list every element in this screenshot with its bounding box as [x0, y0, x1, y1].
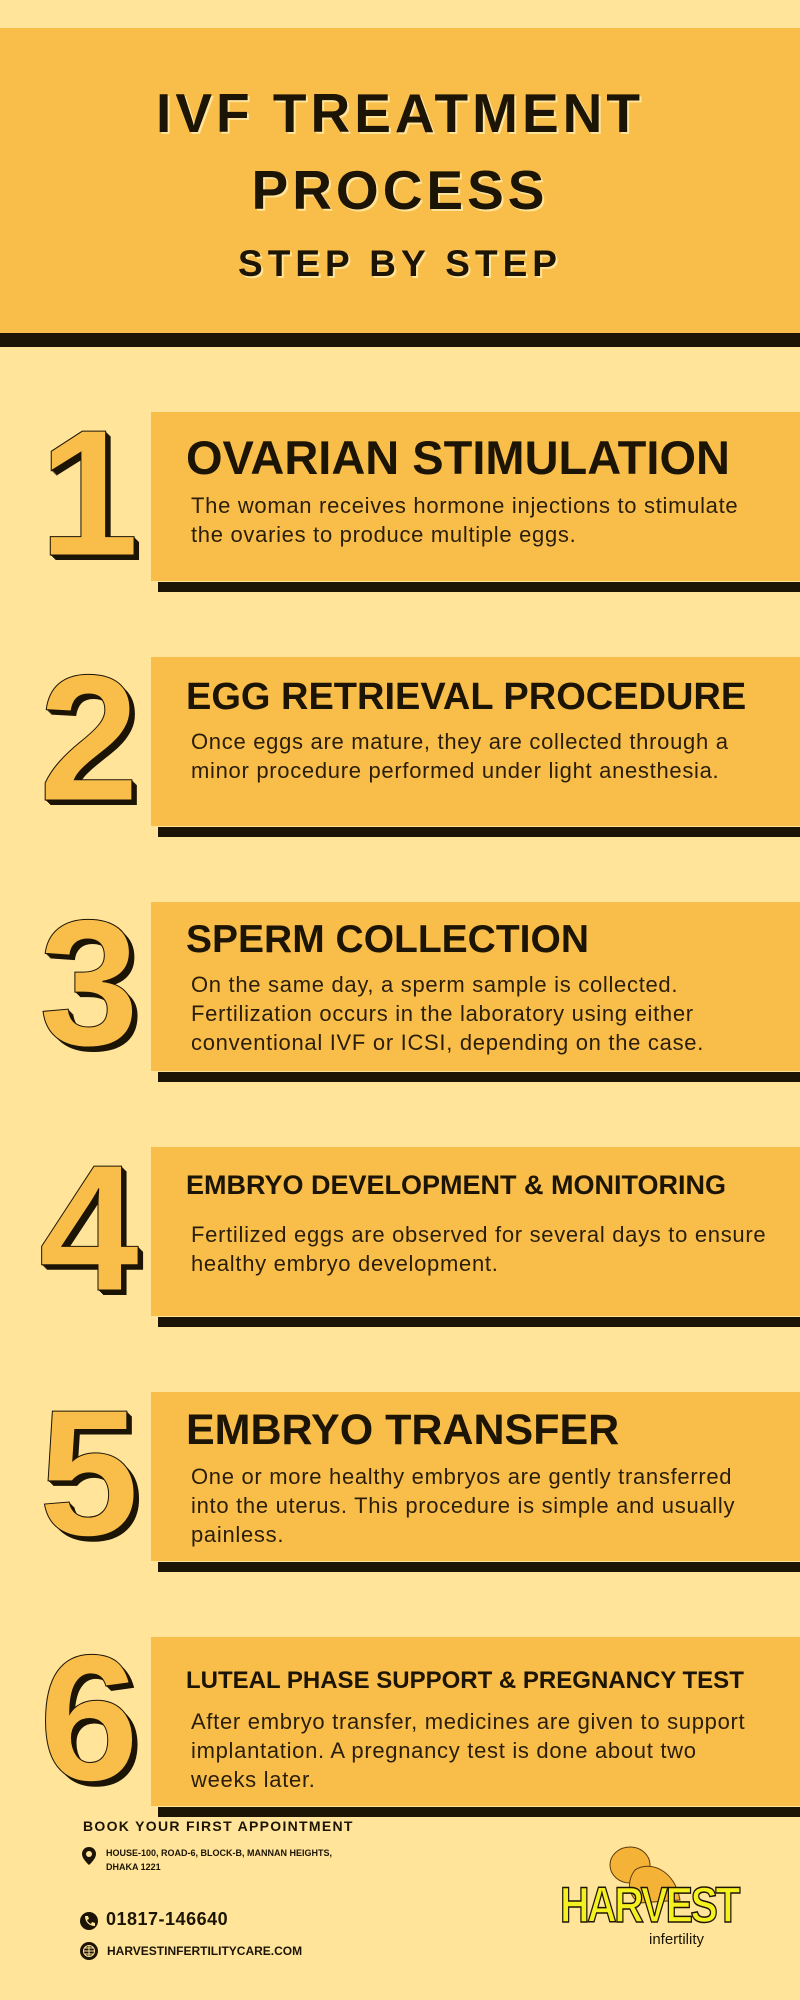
number 3: 3 [39, 883, 139, 1084]
heading 1: OVARIAN STIMULATION [186, 431, 730, 484]
text 1: the ovaries to produce multiple eggs. [191, 522, 576, 547]
card 5 [151, 1392, 800, 1561]
website: HARVESTINFERTILITYCARE.COM [107, 1944, 302, 1958]
title line 1: IVF TREATMENT [156, 82, 644, 144]
icon: location [82, 1847, 96, 1865]
heading 2: EGG RETRIEVAL PROCEDURE [186, 676, 746, 718]
logo text HARVEST: HARVEST [560, 1877, 738, 1933]
text 4 [191, 1222, 766, 1276]
number 2: 2 [39, 638, 139, 839]
phone number: 01817-146640 [106, 1909, 228, 1929]
address [106, 1848, 332, 1872]
card 1 [151, 412, 800, 581]
card 3 [151, 902, 800, 1071]
card 4 [151, 1147, 800, 1316]
text 4: healthy embryo development. [191, 1251, 499, 1276]
step 4 [39, 1128, 800, 1329]
text 3: Fertilization occurs in the laboratory using either [191, 1001, 694, 1026]
number 1: 1 [39, 393, 139, 594]
address: DHAKA 1221 [106, 1862, 161, 1872]
step 1 [39, 393, 800, 594]
header panel [0, 28, 800, 333]
text 6: implantation. A pregnancy test is done about two [191, 1738, 697, 1763]
number 5: 5 [39, 1373, 139, 1574]
address: HOUSE-100, ROAD-6, BLOCK-B, MANNAN HEIGHTS, [106, 1848, 332, 1858]
title [156, 82, 644, 284]
step 3 [39, 883, 800, 1084]
text 5 [191, 1464, 735, 1547]
text 6: After embryo transfer, medicines are given to support [191, 1709, 745, 1734]
text 3: On the same day, a sperm sample is collected. [191, 972, 678, 997]
number 6: 6 [39, 1618, 139, 1819]
card 6 [151, 1637, 800, 1806]
heading 4: EMBRYO DEVELOPMENT & MONITORING [186, 1170, 726, 1200]
logo [560, 1846, 741, 1948]
heading 5: EMBRYO TRANSFER [186, 1406, 619, 1454]
text 2: minor procedure performed under light anesthesia. [191, 758, 719, 783]
step 5 [39, 1373, 800, 1574]
number 4: 4 [39, 1128, 139, 1329]
text 5: One or more healthy embryos are gently transferred [191, 1464, 732, 1489]
text 2 [191, 729, 729, 783]
step 6 [39, 1618, 800, 1819]
title line 2: PROCESS [252, 159, 548, 221]
text 2: Once eggs are mature, they are collected through a [191, 729, 729, 754]
text 3 [191, 972, 704, 1055]
icon: baby [610, 1846, 681, 1904]
text 5: into the uterus. This procedure is simple and usually [191, 1493, 735, 1518]
logo text infertility: infertility [649, 1931, 704, 1948]
text 6 [191, 1709, 745, 1792]
heading 6: LUTEAL PHASE SUPPORT & PREGNANCY TEST [186, 1667, 744, 1694]
footer contact [80, 1818, 354, 1960]
book heading: BOOK YOUR FIRST APPOINTMENT [83, 1818, 354, 1834]
text 5: painless. [191, 1522, 284, 1547]
icon: globe [80, 1942, 98, 1960]
subtitle: STEP BY STEP [238, 243, 562, 284]
heading 3: SPERM COLLECTION [186, 918, 589, 961]
card 2 [151, 657, 800, 826]
text 1: The woman receives hormone injections to stimulate [191, 493, 738, 518]
text 4: Fertilized eggs are observed for several days to ensure [191, 1222, 766, 1247]
step 2 [39, 638, 800, 839]
icon: phone [80, 1912, 98, 1930]
text 1 [191, 493, 738, 547]
text 6: weeks later. [191, 1767, 316, 1792]
text 3: conventional IVF or ICSI, depending on the case. [191, 1030, 704, 1055]
